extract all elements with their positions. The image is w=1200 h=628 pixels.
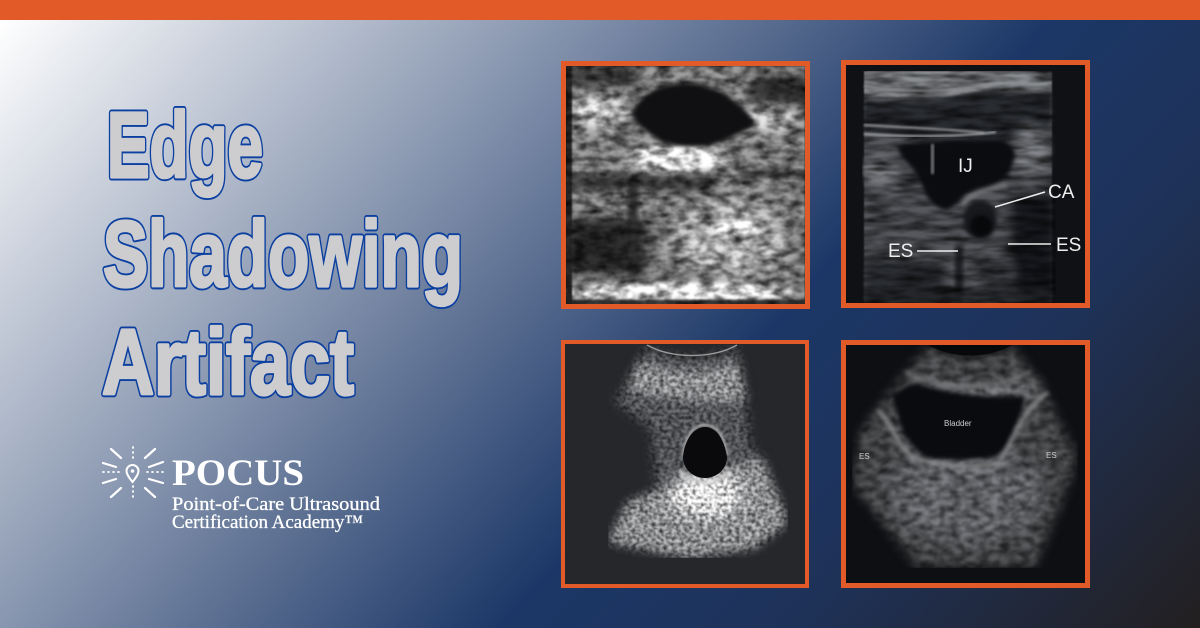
labels xyxy=(888,156,1081,262)
logo tagline line 2: Certification Academy™ xyxy=(172,512,363,533)
bladder xyxy=(892,384,1025,460)
logo wordmark: POCUS xyxy=(172,453,304,494)
labels: ES xyxy=(859,452,870,461)
cystic structure xyxy=(683,425,727,455)
labels xyxy=(859,419,1057,461)
panel: ultrasound bottom right xyxy=(841,340,1090,588)
title outline layer xyxy=(102,93,463,414)
title xyxy=(102,93,463,414)
labels: Bladder xyxy=(944,419,972,428)
title fill layer: Edge xyxy=(107,93,263,197)
panel: ultrasound top right xyxy=(841,60,1090,308)
title outline layer: Artifact xyxy=(102,310,354,414)
carotid artery xyxy=(963,201,997,239)
labels: CA xyxy=(1048,182,1075,203)
labels: ES xyxy=(888,241,913,262)
title outline layer: Edge xyxy=(107,93,263,197)
internal jugular vein xyxy=(898,139,1015,210)
panel: ultrasound top left xyxy=(561,61,812,309)
title fill layer: Shadowing xyxy=(103,202,463,306)
labels: ES xyxy=(1046,451,1057,460)
labels: IJ xyxy=(958,156,973,177)
icon: location pin with rays xyxy=(103,447,163,499)
logo: POCUS xyxy=(103,447,381,533)
labels: ES xyxy=(1056,235,1081,256)
top orange bar xyxy=(0,0,1200,20)
cyst xyxy=(633,83,755,147)
title fill layer: Artifact xyxy=(102,310,354,414)
panel: ultrasound bottom left xyxy=(561,340,809,588)
title fill layer xyxy=(102,93,463,414)
logo tagline line 1: Point-of-Care Ultrasound xyxy=(172,494,381,515)
title outline layer: Shadowing xyxy=(103,202,463,306)
